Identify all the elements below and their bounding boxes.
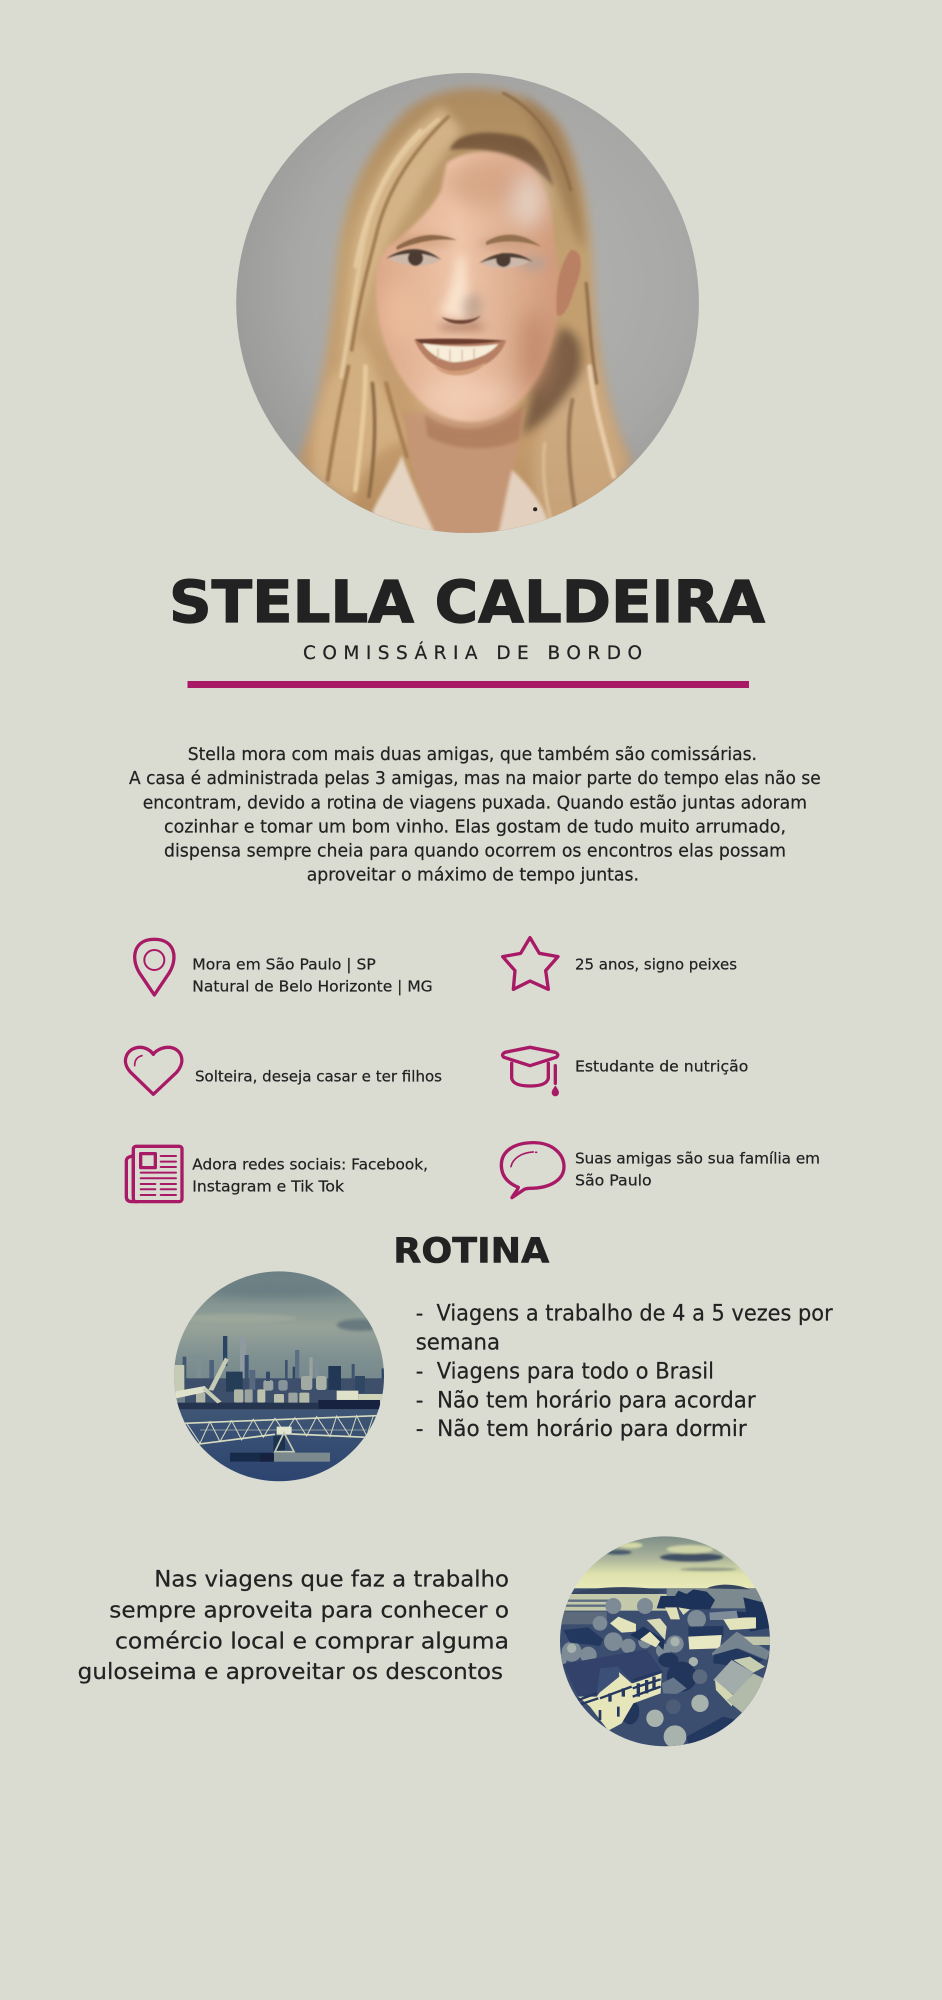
accent bar <box>188 681 749 688</box>
biography paragraph <box>129 745 821 886</box>
routine list: - Viagens a trabalho de 4 a 5 vezes por <box>416 1301 833 1327</box>
travel paragraph: comércio local e comprar alguma <box>115 1628 509 1654</box>
biography paragraph: cozinhar e tomar um bom vinho. Elas gostam de tudo muito arrumado, <box>164 818 786 838</box>
biography paragraph: dispensa sempre cheia para quando ocorrem os encontros elas possam <box>164 842 786 862</box>
icon: heart <box>125 1047 182 1094</box>
road <box>686 1716 735 1744</box>
biography paragraph: Stella mora com mais duas amigas, que também são comissárias. <box>188 745 757 765</box>
fact: location <box>135 939 433 996</box>
travel paragraph: sempre aproveita para conhecer o <box>109 1598 509 1624</box>
hair strands <box>328 93 614 523</box>
photo: refinery and harbour <box>170 1270 390 1485</box>
photo: town view <box>560 1536 770 1746</box>
location text: Natural de Belo Horizonte | MG <box>192 978 433 996</box>
portrait photo: Stella <box>231 67 703 540</box>
travel paragraph <box>78 1567 509 1685</box>
skin: neck <box>406 418 522 533</box>
big house <box>578 1672 662 1731</box>
friends text <box>575 1149 820 1189</box>
dark hair under parting <box>450 133 553 187</box>
nose nostrils <box>441 315 481 324</box>
fact: age and sign <box>503 938 737 989</box>
icon: map pin <box>135 939 174 995</box>
routine list <box>416 1301 833 1442</box>
biography paragraph: aproveitar o máximo de tempo juntas. <box>307 866 639 886</box>
social media text: Adora redes sociais: Facebook, <box>192 1155 428 1173</box>
collar details <box>392 520 412 526</box>
education text: Estudante de nutrição <box>575 1058 748 1076</box>
title: name: STELLA CALDEIRA <box>169 568 765 636</box>
age text: 25 anos, signo peixes <box>575 955 737 973</box>
travel paragraph: Nas viagens que faz a trabalho <box>154 1567 509 1593</box>
friends text: Suas amigas são sua família em <box>575 1149 820 1167</box>
location text <box>192 955 433 996</box>
fact: relationship <box>125 1047 442 1094</box>
foliage <box>553 1598 706 1667</box>
eyes <box>390 252 439 266</box>
face shading <box>381 160 550 413</box>
fact: friends <box>501 1143 820 1198</box>
back houses <box>610 1617 636 1633</box>
face <box>376 152 559 422</box>
smile <box>414 340 506 372</box>
travel paragraph: guloseima e aproveitar os descontos <box>78 1659 503 1685</box>
biography paragraph: A casa é administrada pelas 3 amigas, mas na maior parte do tempo elas não se <box>129 769 821 789</box>
social media text: Instagram e Tik Tok <box>192 1178 344 1196</box>
icon: newspaper <box>126 1146 182 1202</box>
shed <box>713 1660 753 1696</box>
fact: social media <box>126 1146 428 1202</box>
subtitle: job title: COMISSÁRIA DE BORDO <box>303 642 642 664</box>
heading: rotina: ROTINA <box>393 1232 549 1272</box>
icon: star <box>503 938 558 989</box>
routine list: semana <box>416 1329 500 1355</box>
ear <box>556 250 581 316</box>
fact: education <box>503 1047 748 1096</box>
location text: Mora em São Paulo | SP <box>192 955 376 973</box>
biography paragraph: encontram, devido a rotina de viagens puxada. Quando estão juntas adoram <box>143 794 807 814</box>
routine list: - Viagens para todo o Brasil <box>416 1359 714 1385</box>
routine list: - Não tem horário para acordar <box>416 1388 756 1414</box>
icon: speech bubble <box>501 1143 564 1198</box>
friends text: São Paulo <box>575 1171 652 1189</box>
relationship text: Solteira, deseja casar e ter filhos <box>195 1068 442 1086</box>
social media text <box>192 1155 428 1196</box>
brows <box>397 235 457 250</box>
shirt <box>370 455 436 530</box>
routine list: - Não tem horário para dormir <box>416 1416 747 1442</box>
icon: graduation cap <box>503 1047 559 1096</box>
